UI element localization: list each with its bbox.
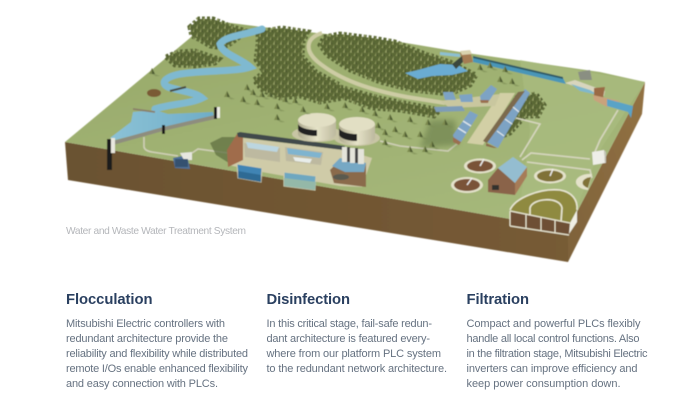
- caption: Water and Waste Water Treatment System: [66, 226, 246, 237]
- body text: Filtration: [466, 318, 648, 390]
- terrain block diagram: [65, 19, 645, 262]
- body text: Filtration: handle all local control functions. Also: [466, 333, 640, 345]
- pump station: [173, 152, 192, 169]
- village houses: [434, 85, 497, 112]
- earth front face: [65, 142, 568, 262]
- body text: Flocculation: reliability and flexibility while distributed: [66, 348, 248, 360]
- body text: Disinfection: dant architecture is featured every-: [266, 333, 430, 345]
- silo 1: [292, 113, 342, 142]
- forest: main centre: [320, 34, 476, 94]
- forest: near long building: [497, 94, 544, 138]
- clarifier: right 1: [534, 168, 566, 184]
- house row left: [453, 111, 478, 145]
- body text: Disinfection: where from our platform PLC system: [266, 348, 441, 360]
- small white cylinders: [342, 147, 364, 164]
- mound: [147, 89, 161, 97]
- grass top surface: [65, 20, 645, 229]
- blue roof building: [330, 160, 366, 187]
- heading: Disinfection: Disinfection: [266, 292, 350, 308]
- river upstream: [155, 29, 262, 109]
- pipeline: intake to white box: [594, 110, 618, 154]
- aeration basin: [510, 190, 577, 235]
- house row long: [483, 89, 530, 148]
- plaza road: [467, 93, 515, 145]
- forest: left small: [166, 51, 219, 66]
- intake works: [565, 70, 620, 107]
- main barn building: [488, 157, 527, 195]
- treatment plant: [210, 132, 372, 190]
- gate house: [452, 50, 473, 69]
- body text: Flocculation: redundant architecture provide the: [66, 333, 228, 345]
- settling tank 1: [244, 143, 280, 162]
- body text: Flocculation: remote I/Os enable enhanced flexibility: [66, 363, 248, 375]
- body text: Filtration: inverters can improve efficiency and: [466, 363, 638, 375]
- body text: Flocculation: Mitsubishi Electric controllers with: [66, 318, 225, 330]
- heading: Flocculation: Flocculation: [66, 292, 152, 308]
- body text: Disinfection: to the redundant network architecture.: [266, 363, 447, 375]
- pipeline: pump to plant: [192, 149, 228, 153]
- dam posts: [107, 107, 220, 170]
- scattered trees: [149, 62, 520, 154]
- column: Flocculation: [66, 292, 248, 390]
- pool 1: [237, 164, 262, 182]
- body text: Filtration: in the filtration stage, Mitsubishi Electric: [466, 348, 648, 360]
- body text: Filtration: Compact and powerful PLCs flexibly: [466, 318, 641, 330]
- body text: Flocculation: and easy connection with PLCs.: [66, 378, 218, 390]
- pool 2: [284, 172, 316, 190]
- silo 2: [334, 117, 380, 146]
- white control box: [592, 150, 606, 165]
- clarifier: right 2: [576, 174, 592, 190]
- concrete pad: [228, 138, 372, 187]
- body text: Flocculation: [66, 318, 248, 390]
- body text: Disinfection: [266, 318, 447, 375]
- dam wall: [113, 115, 215, 145]
- building shadow: [210, 137, 242, 165]
- clarifier: lower left: [451, 177, 483, 193]
- pipelines around main building: [522, 153, 590, 160]
- village building shadow: [420, 120, 458, 148]
- column: Disinfection: [266, 292, 447, 375]
- light grass patch right: [520, 60, 645, 229]
- column: Filtration: [466, 292, 648, 390]
- body text: Filtration: keep power consumption down.: [466, 378, 620, 390]
- forest: below road: [340, 87, 440, 116]
- upper river: [440, 52, 460, 57]
- road through the forest: [309, 33, 445, 103]
- forest: top left: [190, 19, 246, 48]
- footbridges: [133, 109, 155, 112]
- clarifier: upper left: [464, 158, 496, 174]
- earth right face: [568, 82, 645, 262]
- long roof: [237, 132, 345, 150]
- stream to edge: [607, 99, 633, 118]
- pipeline: dam to pump: [144, 137, 178, 156]
- brick wall: [227, 134, 243, 167]
- lake behind dam: [110, 110, 214, 140]
- forest: main left: [254, 28, 343, 102]
- body text: Disinfection: In this critical stage, fail-safe redun-: [266, 318, 432, 330]
- heading: Filtration: Filtration: [466, 292, 529, 308]
- settling tank 2: [285, 147, 323, 165]
- reservoir pond: [405, 64, 468, 79]
- pipeline: silos to village: [380, 141, 458, 151]
